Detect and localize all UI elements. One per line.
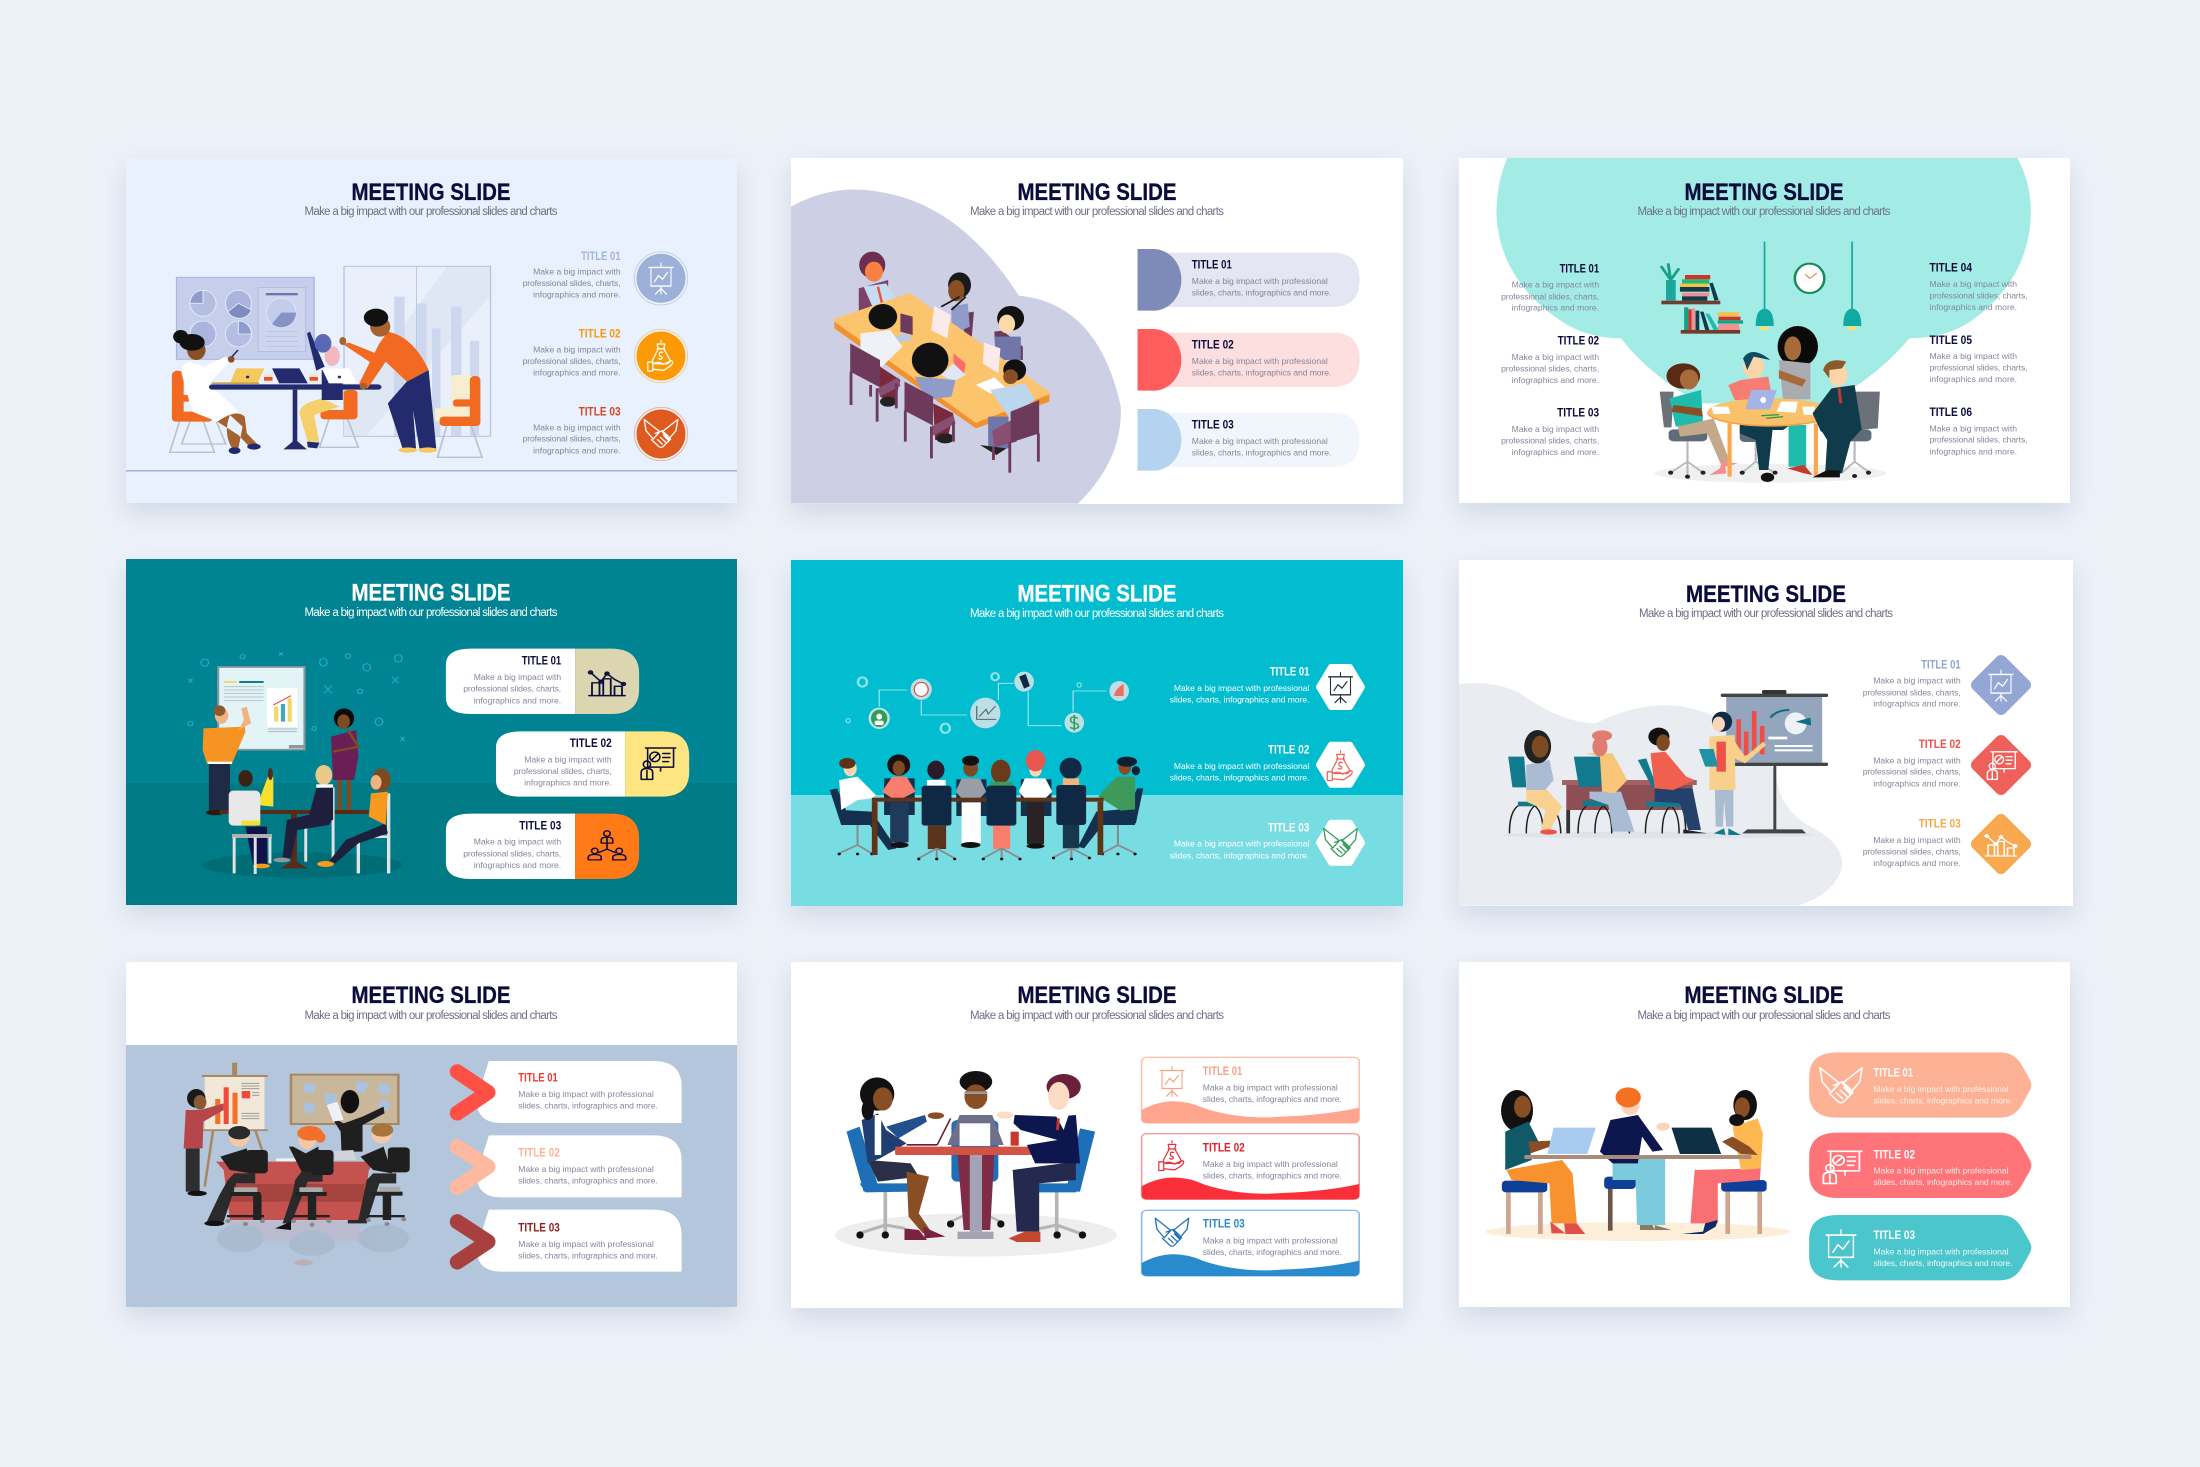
icon: presentation board — [634, 252, 688, 305]
item: title 02: infographics and more. — [1512, 375, 1599, 385]
item: title 01: Make a big impact with — [1873, 676, 1961, 686]
back row people — [882, 750, 1052, 849]
item: title 04: Make a big impact with — [1930, 279, 2017, 289]
icon: chart — [589, 671, 625, 696]
item: title 01: slides, charts, infographics and more. — [1192, 288, 1331, 298]
figure: man with laptop — [1728, 352, 1790, 482]
title: MEETING SLIDE — [1684, 982, 1844, 1009]
panel: slide 3 — [1459, 158, 2070, 513]
item: title 05: professional slides, charts, — [1930, 363, 2028, 373]
figure: woman with paper — [941, 272, 974, 337]
figure: seated woman — [317, 768, 391, 873]
figure: seated woman left — [1666, 363, 1738, 475]
card: title 03: Make a big impact with professional — [1203, 1235, 1338, 1245]
icon: board — [1826, 1230, 1856, 1267]
panel: slide 7 — [126, 962, 737, 1317]
illustration: whiteboard meeting — [188, 652, 405, 878]
item: title 03: professional slides, charts, — [523, 434, 621, 444]
figure: long-haired person — [904, 343, 956, 458]
illustration: isometric meeting — [834, 252, 1049, 473]
icon: presenter diamond — [1977, 741, 2025, 789]
card: title 03 — [1142, 1210, 1359, 1276]
card: title 02 — [496, 731, 689, 797]
item: title 01: TITLE 01 — [1192, 260, 1232, 272]
illustration: office team — [184, 1063, 410, 1266]
figure: seated woman — [1508, 730, 1562, 835]
card: title 01: TITLE 01 — [518, 1073, 558, 1085]
whiteboard — [218, 667, 304, 750]
item: title 02: TITLE 02 — [579, 329, 621, 341]
pendant lamps — [1756, 242, 1861, 330]
subtitle: Make a big impact with our professional slides and charts — [304, 607, 558, 619]
card: title 03: Make a big impact with professional — [518, 1239, 654, 1249]
item: title 02 — [1138, 329, 1360, 391]
illustration: three people with laptops — [1485, 1087, 1790, 1241]
clock — [1795, 264, 1824, 293]
panel: slide 4 — [126, 559, 737, 915]
card: title 01: slides, charts, infographics and more. — [1874, 1095, 2012, 1105]
icon: board diamond — [1977, 661, 2025, 709]
illustration: round table meeting — [1655, 242, 1886, 483]
item: title 02: TITLE 02 — [1268, 745, 1309, 757]
item: title 02 — [1170, 745, 1362, 785]
card: title 01 — [1809, 1052, 2031, 1118]
item: title 01: Make a big impact with — [1512, 280, 1599, 290]
background cloud blob — [791, 189, 1121, 504]
item: title 02 — [1863, 739, 2025, 789]
item: title 06: Make a big impact with — [1930, 423, 2017, 433]
arrow: chevron 1 — [457, 1072, 488, 1113]
card: title 03: TITLE 03 — [519, 820, 561, 832]
item: title 01 — [1170, 667, 1362, 707]
illustration: office meeting — [170, 266, 491, 457]
card: title 03: slides, charts, infographics and more. — [1203, 1247, 1342, 1257]
icon: board — [1160, 1066, 1184, 1096]
figure: man at board — [203, 705, 251, 815]
item: title 03 — [1170, 823, 1362, 863]
figure: man center — [947, 1071, 1004, 1239]
panel: slide 1 — [126, 158, 737, 513]
title: MEETING SLIDE — [1684, 179, 1844, 206]
card: title 01 — [457, 1061, 682, 1123]
table with laptops — [209, 368, 381, 449]
diagram: connected icons — [846, 672, 1129, 733]
card: title 02: Make a big impact with professional — [518, 1164, 654, 1174]
item: title 01: infographics and more. — [1512, 303, 1599, 313]
item: title 03: infographics and more. — [533, 445, 621, 455]
card: title 03: professional slides, charts, — [463, 848, 561, 858]
item: title 03: professional slides, charts, — [1501, 436, 1599, 446]
items: left column — [1501, 263, 1600, 457]
card: title 03: slides, charts, infographics and more. — [518, 1251, 658, 1261]
icon: chart diamond — [1977, 820, 2025, 868]
figure: presenter — [1699, 712, 1766, 835]
item: title 05: Make a big impact with — [1930, 351, 2017, 361]
item: title 01: TITLE 01 — [1270, 667, 1310, 679]
item: title 02: infographics and more. — [1873, 778, 1961, 788]
item: title 02: TITLE 02 — [1919, 739, 1961, 751]
subtitle: Make a big impact with our professional slides and charts — [1639, 608, 1893, 620]
subtitle: Make a big impact with our professional slides and charts — [970, 1010, 1224, 1022]
item: title 01: slides, charts, infographics and more. — [1170, 695, 1309, 705]
item: title 02 — [523, 329, 688, 383]
card: title 03 — [446, 814, 639, 879]
item: title 05 — [1930, 335, 2028, 384]
item: title 02: Make a big impact with — [533, 345, 621, 355]
item: title 04: TITLE 04 — [1930, 263, 1973, 275]
card: title 01: TITLE 01 — [1874, 1068, 1913, 1080]
card: title 03: TITLE 03 — [1203, 1219, 1245, 1231]
figure: standing man — [339, 309, 437, 453]
arrow: chevron 2 — [457, 1147, 488, 1187]
card: title 02: slides, charts, infographics and more. — [1874, 1177, 2012, 1187]
card: title 02: professional slides, charts, — [514, 766, 612, 776]
subtitle: Make a big impact with our professional slides and charts — [1638, 206, 1891, 218]
front row people — [917, 758, 1091, 860]
table — [219, 810, 369, 868]
card: title 02: TITLE 02 — [1203, 1142, 1245, 1154]
icon: handshake — [634, 407, 688, 461]
item: title 06 — [1930, 407, 2028, 456]
item: title 02: slides, charts, infographics and more. — [1192, 368, 1331, 378]
figure: blond man — [273, 765, 333, 862]
figure: seated man with raised arm — [229, 768, 273, 874]
figure: presenter — [184, 1089, 224, 1196]
card: title 02: infographics and more. — [524, 778, 612, 788]
item: title 03: Make a big impact with — [1873, 835, 1961, 845]
figure: man with paper — [994, 306, 1024, 360]
item: title 02: Make a big impact with professional — [1174, 761, 1309, 771]
icon: handshake — [1820, 1068, 1862, 1103]
figure: seated man one — [204, 1126, 268, 1226]
title: MEETING SLIDE — [1018, 179, 1176, 206]
card: title 02: Make a big impact with — [524, 754, 612, 764]
figure: standing woman — [331, 708, 358, 810]
icon: money bag — [634, 329, 688, 383]
figure: seated man three — [348, 1123, 410, 1226]
subtitle: Make a big impact with our professional slides and charts — [1638, 1010, 1891, 1022]
item: title 03: Make a big impact with professional — [1174, 839, 1309, 849]
illustration: board table meeting — [830, 750, 1143, 860]
item: title 01: Make a big impact with professional — [1174, 683, 1309, 693]
card: title 02: Make a big impact with professional — [1203, 1159, 1338, 1169]
item: title 03: TITLE 03 — [1557, 408, 1599, 420]
card: title 02 — [1142, 1134, 1359, 1199]
card: title 03: TITLE 03 — [518, 1223, 560, 1235]
title: MEETING SLIDE — [352, 179, 510, 206]
item: title 01: TITLE 01 — [581, 251, 621, 263]
item: title 03: TITLE 03 — [1919, 818, 1961, 830]
item: title 02: slides, charts, infographics and more. — [1170, 772, 1309, 782]
card: title 02: slides, charts, infographics and more. — [1203, 1170, 1342, 1180]
desk — [1562, 780, 1697, 833]
title: MEETING SLIDE — [1018, 982, 1176, 1009]
chairs — [1660, 392, 1880, 479]
item: title 02: professional slides, charts, — [523, 356, 621, 366]
panel: slide 5 — [791, 560, 1403, 916]
cork board — [291, 1075, 398, 1124]
item: title 02: Make a big impact with — [1512, 352, 1599, 362]
item: title 06: infographics and more. — [1930, 446, 2017, 456]
item: title 03: slides, charts, infographics and more. — [1170, 850, 1309, 860]
card: title 02 — [457, 1135, 682, 1197]
panel: slide 9 — [1459, 962, 2070, 1317]
item: title 01 — [523, 251, 688, 305]
icon: board hexagon — [1319, 667, 1362, 707]
card: title 03: TITLE 03 — [1874, 1230, 1915, 1242]
figure: seated woman — [275, 1126, 334, 1230]
item: title 03 — [1863, 818, 2025, 868]
item: title 02: professional slides, charts, — [1501, 364, 1599, 374]
chair: right — [435, 375, 482, 457]
illustration: three people at table — [835, 1071, 1117, 1257]
item: title 03 — [1501, 408, 1599, 457]
easel chart — [202, 1063, 268, 1187]
panel: slide 6 — [1459, 560, 2073, 916]
item: title 01: infographics and more. — [533, 290, 621, 300]
panel: slide 8 — [791, 962, 1403, 1318]
item: title 03: Make a big impact with — [1512, 424, 1599, 434]
icon: handshake — [1155, 1218, 1189, 1246]
item: title 03: slides, charts, infographics and more. — [1192, 448, 1331, 458]
icon: handshake hexagon — [1319, 823, 1362, 863]
table with laptop — [1524, 1128, 1751, 1159]
projector screen — [1721, 690, 1828, 833]
item: title 05: TITLE 05 — [1930, 335, 1973, 347]
title: MEETING SLIDE — [1686, 581, 1846, 608]
figure: left front person — [850, 304, 902, 422]
figure: woman left — [1501, 1090, 1596, 1234]
illustration: presentation — [1503, 690, 1828, 838]
title: MEETING SLIDE — [352, 580, 510, 607]
item: title 06: TITLE 06 — [1930, 407, 1972, 419]
item: title 05: infographics and more. — [1930, 374, 2017, 384]
round table — [1707, 390, 1834, 477]
card: title 01 — [1142, 1057, 1359, 1123]
desk — [216, 1150, 375, 1220]
item: title 01 — [1501, 263, 1600, 313]
arrow: chevron 3 — [457, 1222, 488, 1262]
card: title 01: slides, charts, infographics and more. — [518, 1101, 658, 1111]
figure: top left man — [859, 252, 904, 313]
figure: seated woman behind laptop — [299, 332, 358, 448]
figure: man right — [997, 1074, 1095, 1242]
figure: bottom right man — [980, 359, 1039, 473]
item: title 01 — [1863, 659, 2025, 709]
icon: money bag — [1159, 1141, 1184, 1170]
card: title 03 — [1809, 1215, 2031, 1280]
figure: woman left — [847, 1077, 945, 1240]
figure: seated man red shirt — [1638, 728, 1707, 833]
item: title 02 — [1501, 336, 1599, 385]
card: title 02: TITLE 02 — [518, 1148, 560, 1160]
table — [872, 798, 1104, 855]
item: title 03 — [1138, 409, 1360, 471]
subtitle: Make a big impact with our professional slides and charts — [304, 1010, 558, 1022]
icon: presenter — [641, 748, 676, 779]
item: title 02: Make a big impact with professional — [1192, 356, 1328, 366]
card: title 03 — [457, 1210, 682, 1272]
card: title 01: Make a big impact with professional — [1874, 1084, 2009, 1094]
figure: woman right — [1682, 1090, 1767, 1234]
figure: man in suit — [1813, 360, 1862, 477]
item: title 02: infographics and more. — [533, 368, 621, 378]
floating decoration — [188, 652, 405, 741]
icon: money hexagon — [1319, 745, 1362, 785]
item: title 02: Make a big impact with — [1873, 755, 1961, 765]
item: title 01: professional slides, charts, — [1863, 687, 1961, 697]
card: title 01 — [446, 649, 639, 714]
card: title 01: Make a big impact with professional — [518, 1089, 654, 1099]
item: title 02: TITLE 02 — [1192, 339, 1234, 351]
item: title 03: TITLE 03 — [1192, 419, 1234, 431]
card: title 01: TITLE 01 — [522, 655, 562, 667]
item: title 06: professional slides, charts, — [1930, 435, 2028, 445]
card: title 01: professional slides, charts, — [463, 684, 561, 694]
item: title 03: professional slides, charts, — [1863, 846, 1961, 856]
figure: standing woman — [1778, 326, 1818, 475]
card: title 03: slides, charts, infographics and more. — [1874, 1258, 2012, 1268]
items: right column — [1930, 263, 2028, 456]
subtitle: Make a big impact with our professional slides and charts — [304, 206, 558, 218]
item: title 03: Make a big impact with — [533, 422, 621, 432]
right person — [1078, 757, 1143, 855]
card: title 03: Make a big impact with — [474, 837, 561, 847]
table — [834, 294, 1049, 428]
item: title 01: professional slides, charts, — [1501, 291, 1599, 301]
card: title 02: TITLE 02 — [1874, 1149, 1915, 1161]
icon: presenter — [1823, 1151, 1862, 1184]
card: title 01: Make a big impact with professional — [1203, 1082, 1338, 1092]
item: title 04: professional slides, charts, — [1930, 290, 2028, 300]
card: title 03: infographics and more. — [474, 860, 561, 870]
table — [895, 1118, 1051, 1155]
item: title 01: Make a big impact with professional — [1192, 276, 1328, 286]
card: title 02 — [1809, 1133, 2031, 1198]
background teal blob — [1496, 158, 2031, 403]
item: title 02: TITLE 02 — [1558, 336, 1599, 348]
icon: network — [588, 831, 626, 860]
figure: seated woman — [170, 330, 261, 454]
title: MEETING SLIDE — [352, 982, 510, 1009]
card: title 01: TITLE 01 — [1203, 1066, 1243, 1078]
item: title 01: TITLE 01 — [1560, 263, 1600, 275]
shelves with books — [1661, 263, 1743, 334]
card: title 02: TITLE 02 — [570, 738, 612, 750]
item: title 03: infographics and more. — [1512, 447, 1599, 457]
item: title 01: professional slides, charts, — [523, 278, 621, 288]
card: title 02: Make a big impact with professional — [1874, 1165, 2009, 1175]
figure: standing man with note — [327, 1090, 384, 1152]
item: title 03: TITLE 03 — [579, 407, 621, 419]
item: title 04: infographics and more. — [1930, 302, 2017, 312]
left person — [830, 758, 896, 855]
card: title 01: slides, charts, infographics and more. — [1203, 1094, 1342, 1104]
item: title 04 — [1930, 263, 2028, 312]
figure: man center — [1600, 1087, 1672, 1231]
card: title 03: Make a big impact with professional — [1874, 1246, 2009, 1256]
item: title 03: Make a big impact with professional — [1192, 436, 1328, 446]
item: title 03 — [523, 407, 688, 461]
card: title 01: infographics and more. — [474, 695, 561, 705]
item: title 01 — [1138, 249, 1360, 311]
item: title 02: professional slides, charts, — [1863, 767, 1961, 777]
card: title 02: slides, charts, infographics and more. — [518, 1176, 658, 1186]
subtitle: Make a big impact with our professional slides and charts — [970, 206, 1224, 218]
figure: seated man — [1574, 730, 1634, 833]
reflection — [217, 1221, 409, 1266]
panel: slide 2 — [791, 158, 1403, 514]
item: title 03: infographics and more. — [1873, 858, 1961, 868]
item: title 01: TITLE 01 — [1921, 659, 1961, 671]
item: title 01: infographics and more. — [1873, 699, 1961, 709]
subtitle: Make a big impact with our professional slides and charts — [970, 608, 1224, 620]
item: title 03: TITLE 03 — [1268, 823, 1309, 835]
background grey blob — [1459, 683, 1842, 906]
card: title 01: Make a big impact with — [474, 672, 561, 682]
item: title 01: Make a big impact with — [533, 267, 621, 277]
title: MEETING SLIDE — [1018, 581, 1176, 608]
